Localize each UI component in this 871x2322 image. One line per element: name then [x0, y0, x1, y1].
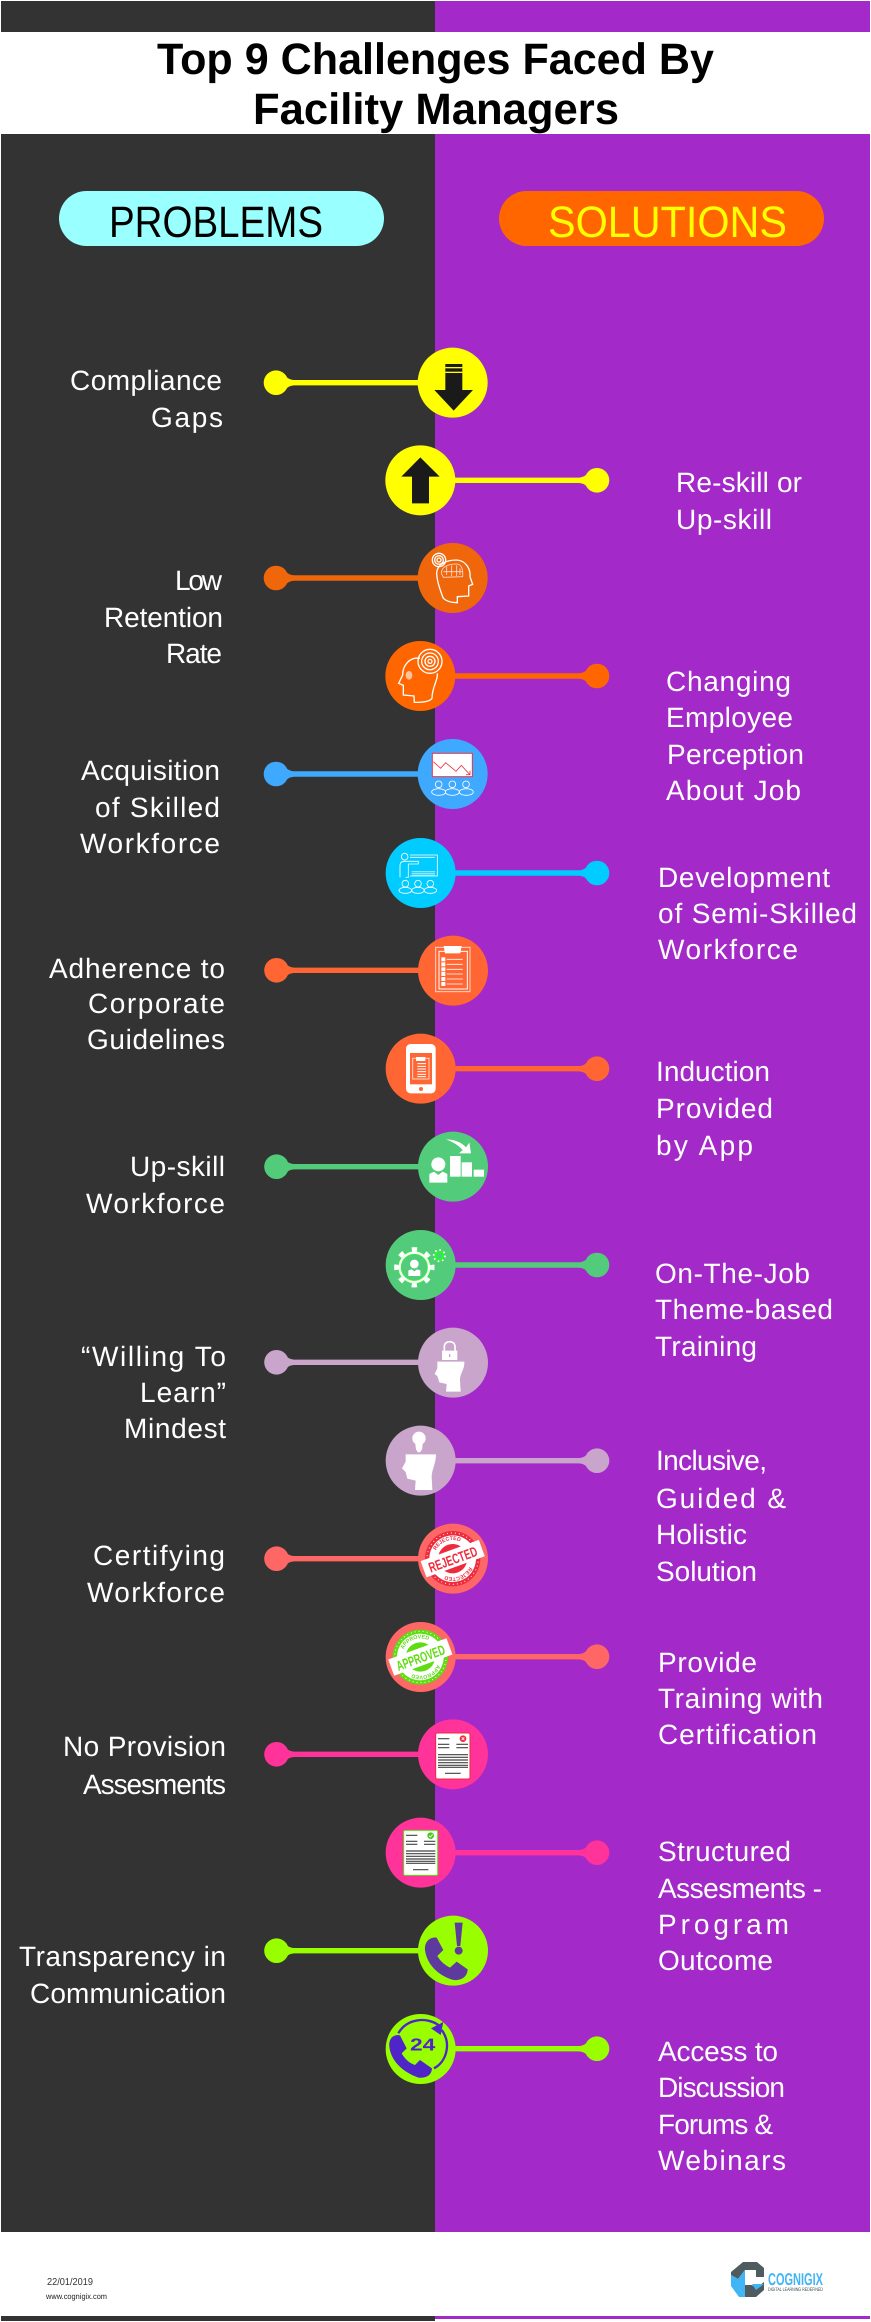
label: of Skilled	[95, 792, 220, 823]
problem 1: compliance gaps	[70, 348, 488, 433]
label	[658, 2036, 786, 2176]
icon: approved stamp: APPROVED	[400, 1634, 429, 1650]
label: Workforce	[658, 934, 798, 965]
solution 4: induction provided by app	[386, 1034, 773, 1161]
connector	[420, 1253, 609, 1277]
bottom bar: right	[435, 2316, 870, 2319]
label: Assesments -	[658, 1873, 822, 1904]
solution 1: re-skill or up-skill	[385, 445, 802, 535]
icon: down arrow	[418, 348, 488, 418]
title band	[1, 32, 870, 134]
label: Retention	[104, 602, 223, 633]
label: Up-skill	[676, 504, 772, 535]
label: Discussion	[658, 2072, 785, 2103]
label: Learn”	[140, 1377, 226, 1408]
label: Theme-based	[655, 1294, 833, 1325]
label: Certification	[658, 1719, 817, 1750]
label	[656, 1445, 786, 1587]
label	[19, 1941, 226, 2009]
label: Workforce	[80, 828, 220, 859]
heading pill: solutions	[499, 191, 824, 247]
icon: approved stamp	[386, 1622, 456, 1692]
label	[666, 666, 804, 806]
connector	[420, 1840, 609, 1865]
icon: clipboard checklist	[418, 936, 488, 1006]
label: Training with	[658, 1683, 823, 1714]
logo: cognigix: DIGITAL LEARNING REDEFINED	[768, 2287, 823, 2293]
problem 7: certifying workforce	[87, 1524, 488, 1608]
label: Holistic	[656, 1519, 747, 1550]
problem 5: up-skill workforce	[86, 1132, 488, 1219]
label: Acquisition	[81, 755, 220, 786]
panel: problems background	[1, 1, 435, 2321]
label: Structured	[658, 1836, 791, 1867]
label: Corporate	[88, 988, 225, 1019]
icon: presenter and audience	[386, 838, 456, 908]
problem 6: willing to learn mindset	[81, 1328, 488, 1444]
icon: head with spiral	[385, 641, 455, 711]
label: About Job	[666, 775, 801, 806]
label	[86, 1151, 225, 1219]
label: Provide	[658, 1647, 757, 1678]
label: Employee	[666, 702, 793, 733]
label: Assesments	[83, 1769, 226, 1800]
connector	[420, 1056, 609, 1081]
label	[655, 1258, 833, 1362]
label: No Provision	[63, 1731, 226, 1762]
connector	[264, 1546, 455, 1571]
icon: rejected stamp: REJECTED	[433, 1536, 461, 1550]
label: Provided	[656, 1093, 773, 1124]
label: Training	[655, 1331, 757, 1362]
label: Transparency in	[19, 1941, 226, 1972]
icon: rejected stamp: REJECTED	[444, 1567, 472, 1581]
connector	[420, 2036, 609, 2061]
label	[49, 953, 225, 1055]
label	[87, 1540, 225, 1608]
label	[656, 1056, 773, 1161]
problem 3: acquisition of skilled workforce	[80, 739, 488, 859]
label	[658, 1647, 823, 1750]
heading pill: problems	[59, 191, 384, 247]
icon: gears with person	[386, 1230, 456, 1300]
solution 7: provide training with certification	[386, 1622, 823, 1750]
problem 2: low retention rate	[104, 543, 488, 669]
label: Certifying	[93, 1540, 225, 1571]
connector	[420, 468, 609, 493]
icon: head with light bulb	[386, 1426, 456, 1496]
label: Low	[175, 565, 223, 596]
solution 5: on-the-job theme-based training	[386, 1230, 833, 1362]
solution 2: changing employee perception	[385, 641, 804, 806]
solution 3: development of semi-skilled workforce	[386, 838, 857, 965]
solution 8: structured assessments	[386, 1818, 822, 1976]
connector	[264, 1938, 455, 1963]
footer	[1, 2232, 870, 2316]
label: On-The-Job	[655, 1258, 810, 1289]
heading pill: solutions: SOLUTIONS	[548, 198, 787, 247]
label: Compliance	[70, 365, 222, 396]
label: Mindest	[124, 1413, 226, 1444]
label: Guided &	[656, 1483, 786, 1514]
icon: rejected document	[418, 1719, 488, 1789]
connector	[264, 762, 455, 786]
title band: Top 9 Challenges Faced By	[157, 35, 715, 84]
label: Changing	[666, 666, 791, 697]
icon: rejected stamp: REJECTED	[426, 1543, 479, 1575]
label: Communication	[30, 1978, 226, 2009]
connector	[420, 1644, 609, 1669]
icon: 24 hour phone	[386, 2014, 456, 2084]
icon: up arrow	[385, 445, 455, 515]
icon: phone with exclamation	[418, 1916, 488, 1986]
problem 8: no provision assessments	[63, 1719, 488, 1800]
logo: cognigix	[731, 2262, 823, 2297]
connector	[420, 861, 609, 885]
icon: person with rising bars	[418, 1132, 488, 1202]
label: Up-skill	[130, 1151, 225, 1182]
icon: 24 hour phone: 24	[410, 2035, 435, 2054]
label	[676, 467, 802, 535]
connector	[420, 664, 609, 688]
label: Access to	[658, 2036, 778, 2067]
icon: approved stamp: APPROVED	[394, 1642, 447, 1674]
icon: approved document	[386, 1818, 456, 1888]
label: Adherence to	[49, 953, 225, 984]
footer website: www.cognigix.com	[45, 2292, 107, 2301]
icon: head with brain	[418, 543, 488, 613]
connector	[420, 1448, 609, 1473]
label: Workforce	[86, 1188, 225, 1219]
label	[81, 1341, 226, 1444]
label: Workforce	[87, 1577, 225, 1608]
solution 9: access to discussion forums and webinars	[386, 2014, 786, 2176]
icon: rejected stamp	[418, 1524, 488, 1594]
icon: phone with checklist	[386, 1034, 456, 1104]
label	[70, 365, 223, 433]
footer date: 22/01/2019	[47, 2277, 93, 2288]
label: Webinars	[658, 2145, 786, 2176]
label: Perception	[667, 739, 804, 770]
connector	[264, 1742, 455, 1767]
title band: Facility Managers	[253, 85, 619, 134]
connector	[264, 1154, 455, 1179]
label: Induction	[656, 1056, 770, 1087]
label: Solution	[656, 1556, 757, 1587]
label: Gaps	[151, 402, 223, 433]
label	[104, 565, 223, 669]
label	[80, 755, 220, 859]
connector	[264, 1350, 455, 1375]
label	[63, 1731, 226, 1800]
logo: cognigix: COGNIGIX	[768, 2270, 823, 2289]
icon: head with lock	[418, 1328, 488, 1398]
label: Guidelines	[87, 1024, 225, 1055]
label: Rate	[166, 638, 222, 669]
connector	[264, 566, 455, 590]
solution 6: inclusive guided holistic solution	[386, 1426, 786, 1587]
problem 9: transparency in communication	[19, 1916, 488, 2009]
label: “Willing To	[81, 1341, 226, 1372]
label: Forums &	[658, 2109, 773, 2140]
label	[658, 1836, 822, 1976]
label: Outcome	[658, 1945, 773, 1976]
label: Inclusive,	[656, 1445, 767, 1476]
label: by App	[656, 1130, 753, 1161]
label	[658, 862, 857, 965]
heading pill: problems: PROBLEMS	[109, 198, 323, 247]
label: of Semi-Skilled	[658, 898, 857, 929]
bottom bar: left	[1, 2316, 435, 2321]
panel: solutions background	[435, 1, 870, 2319]
label: Re-skill or	[676, 467, 802, 498]
icon: approved stamp: APPROVED	[412, 1664, 440, 1680]
connector	[264, 958, 455, 983]
connector	[264, 370, 455, 395]
label: Program	[658, 1909, 789, 1940]
label: Development	[658, 862, 830, 893]
icon: falling chart and audience	[418, 739, 488, 809]
problem 4: adherence to corporate guidelines	[49, 936, 488, 1055]
